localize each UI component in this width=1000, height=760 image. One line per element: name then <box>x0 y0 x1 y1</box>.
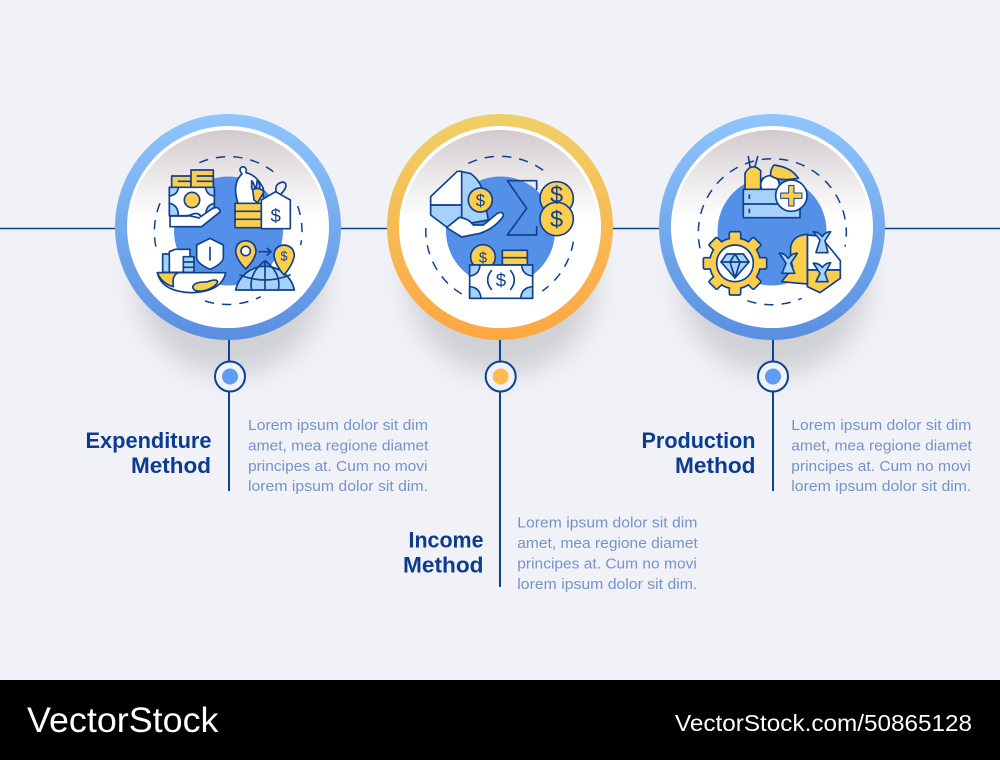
inner disc <box>399 126 601 328</box>
icon: produce crate with plus <box>743 157 807 218</box>
icon group: production <box>698 157 846 305</box>
heading: expenditure method: Method <box>131 453 211 478</box>
icon: sack coins and price tag <box>235 167 290 229</box>
description text: amet, mea regione diamet <box>248 437 429 454</box>
heading: income method: Income <box>408 528 484 553</box>
circle shadow <box>680 187 868 375</box>
dashed ring <box>698 159 846 305</box>
footer image id: VectorStock.com/50865128 <box>675 710 972 736</box>
icon: city shield and globe <box>157 238 226 293</box>
connector line <box>228 338 230 491</box>
icon group: income: $ <box>496 270 507 291</box>
inner disc <box>671 126 873 328</box>
dashed ring <box>426 156 573 294</box>
description text: lorem ipsum dolor sit dim. <box>248 478 428 495</box>
icon group: income <box>426 156 573 298</box>
blue centre disc <box>174 176 283 286</box>
outer ring <box>387 114 613 340</box>
timeline node <box>215 362 245 392</box>
icon group: income: $ <box>550 182 563 208</box>
description text: lorem ipsum dolor sit dim. <box>517 576 697 593</box>
outer ring <box>659 114 885 340</box>
icon group: income: $ <box>476 191 485 210</box>
icon: sigma <box>507 181 537 235</box>
icon group: expenditure <box>154 157 302 305</box>
icon: stacked coins <box>540 182 573 236</box>
dashed ring <box>154 157 302 305</box>
description text: principes at. Cum no movi <box>791 458 971 475</box>
circle shadow <box>136 187 324 375</box>
heading: income method: Method <box>403 553 484 578</box>
icon: head with growing plants <box>779 232 840 293</box>
timeline node <box>486 362 516 392</box>
description text: Lorem ipsum dolor sit dim <box>517 515 697 532</box>
footer brand: VectorStock <box>27 701 219 740</box>
connector line <box>499 338 501 587</box>
panel: production method <box>642 114 973 495</box>
connector line <box>772 338 774 491</box>
timeline node <box>758 362 788 392</box>
icon: gear with diamond <box>703 232 767 295</box>
heading: expenditure method: Expenditure <box>86 428 212 453</box>
description text: Lorem ipsum dolor sit dim <box>248 417 428 434</box>
description text: amet, mea regione diamet <box>791 437 973 454</box>
description text: lorem ipsum dolor sit dim. <box>791 478 971 495</box>
heading: production method: Method <box>675 453 756 478</box>
description text: Lorem ipsum dolor sit dim <box>791 417 971 434</box>
icon group: income: $ <box>479 250 487 266</box>
footer band <box>0 680 1000 760</box>
description text: principes at. Cum no movi <box>517 556 697 572</box>
icon: money in hand <box>169 170 220 227</box>
blue centre disc <box>446 176 555 286</box>
icon: location pins on globe <box>236 241 294 290</box>
description text: amet, mea regione diamet <box>517 535 699 552</box>
icon: banknote and coin <box>470 245 533 298</box>
description text: principes at. Cum no movi <box>248 458 428 475</box>
blue centre disc <box>718 176 826 286</box>
icon group: expenditure: $ <box>270 205 281 226</box>
panel: income method <box>387 114 699 593</box>
timeline axis <box>0 228 1000 230</box>
panel: expenditure method <box>86 114 429 495</box>
heading: production method: Production <box>642 428 756 453</box>
outer ring <box>115 114 341 340</box>
icon: pie chart in hand <box>431 171 503 237</box>
inner disc <box>127 126 329 328</box>
icon group: expenditure: $ <box>280 250 288 264</box>
icon group: income: $ <box>550 206 563 232</box>
circle shadow <box>408 187 596 375</box>
